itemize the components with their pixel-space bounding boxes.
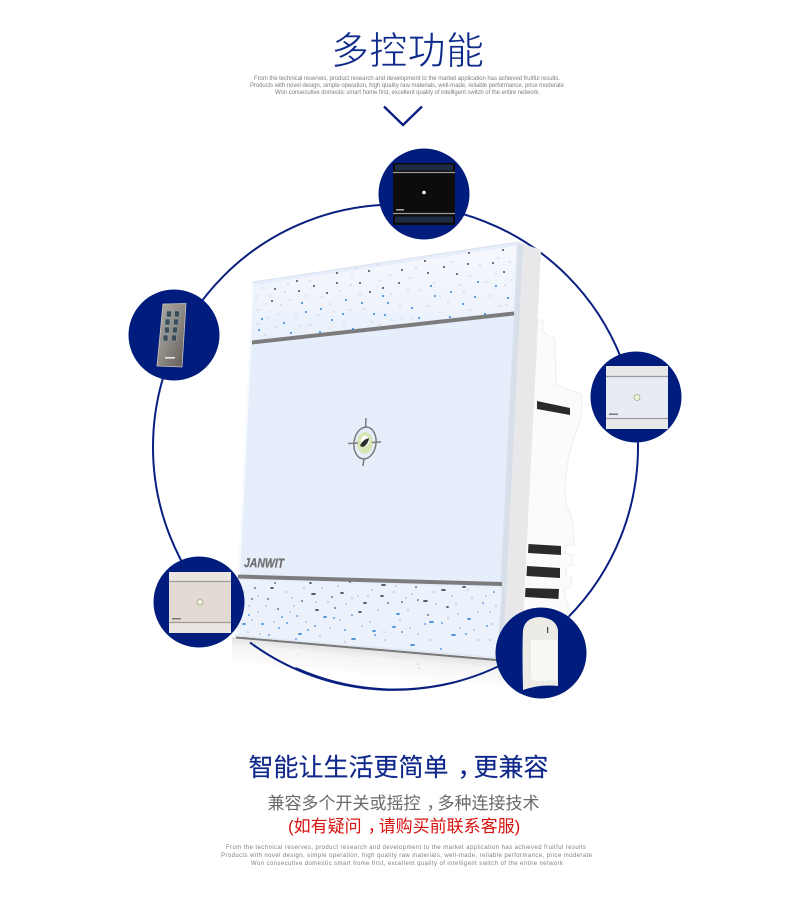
intro text: Won consecutive domestic smart home first, excellent quality of intelligent switch of the entire network. <box>275 90 540 96</box>
intro text: From the technical reserves, product research and development to the market application has achieved fruitful results. <box>254 76 560 82</box>
description: 兼容多个开关或摇控 ，多种连接技术 <box>268 794 540 813</box>
node: white switch <box>590 352 682 442</box>
divider bars <box>238 312 514 586</box>
title: 多控功能 <box>331 31 484 73</box>
glass panel <box>235 242 518 658</box>
connecting circle <box>153 204 638 690</box>
switch rear housing <box>522 320 582 622</box>
node: champagne switch <box>154 556 244 648</box>
red notice: (如有疑问 ，请购买前联系客服) <box>288 817 520 836</box>
speckles <box>240 250 512 649</box>
subheading: 智能让生活更简单 ，更兼容 <box>248 754 549 782</box>
intro text: Products with novel design, simple operation, high quality raw materials, well-made, reliable performance, price moderate <box>250 83 565 89</box>
node: motion sensor <box>496 608 586 698</box>
switch side edge <box>497 242 541 658</box>
node: remote control <box>128 290 220 380</box>
footer text: From the technical reserves, product research and development to the market application has achieved fruitful results <box>226 845 586 851</box>
footer text: Products with novel design, simple operation, high quality raw materials, well-made, reliable performance, price moderate <box>221 853 593 859</box>
speckled top band <box>253 246 516 342</box>
intro text <box>250 76 565 96</box>
brand logo: JANWIT: JANWIT <box>244 555 285 571</box>
node: black switch <box>378 148 470 240</box>
footer text: Won consecutive domestic smart home first, excellent quality of intelligent switch of the entire network <box>251 861 564 867</box>
faint reflected speckles <box>270 648 445 668</box>
icon: chevron down <box>384 106 422 125</box>
speckled bottom band <box>237 580 502 656</box>
reflection under the panel <box>232 637 505 686</box>
product: switch module <box>232 242 582 690</box>
footer text <box>221 845 593 867</box>
glass left edge highlight <box>236 283 253 635</box>
icon: touch target <box>348 418 381 466</box>
